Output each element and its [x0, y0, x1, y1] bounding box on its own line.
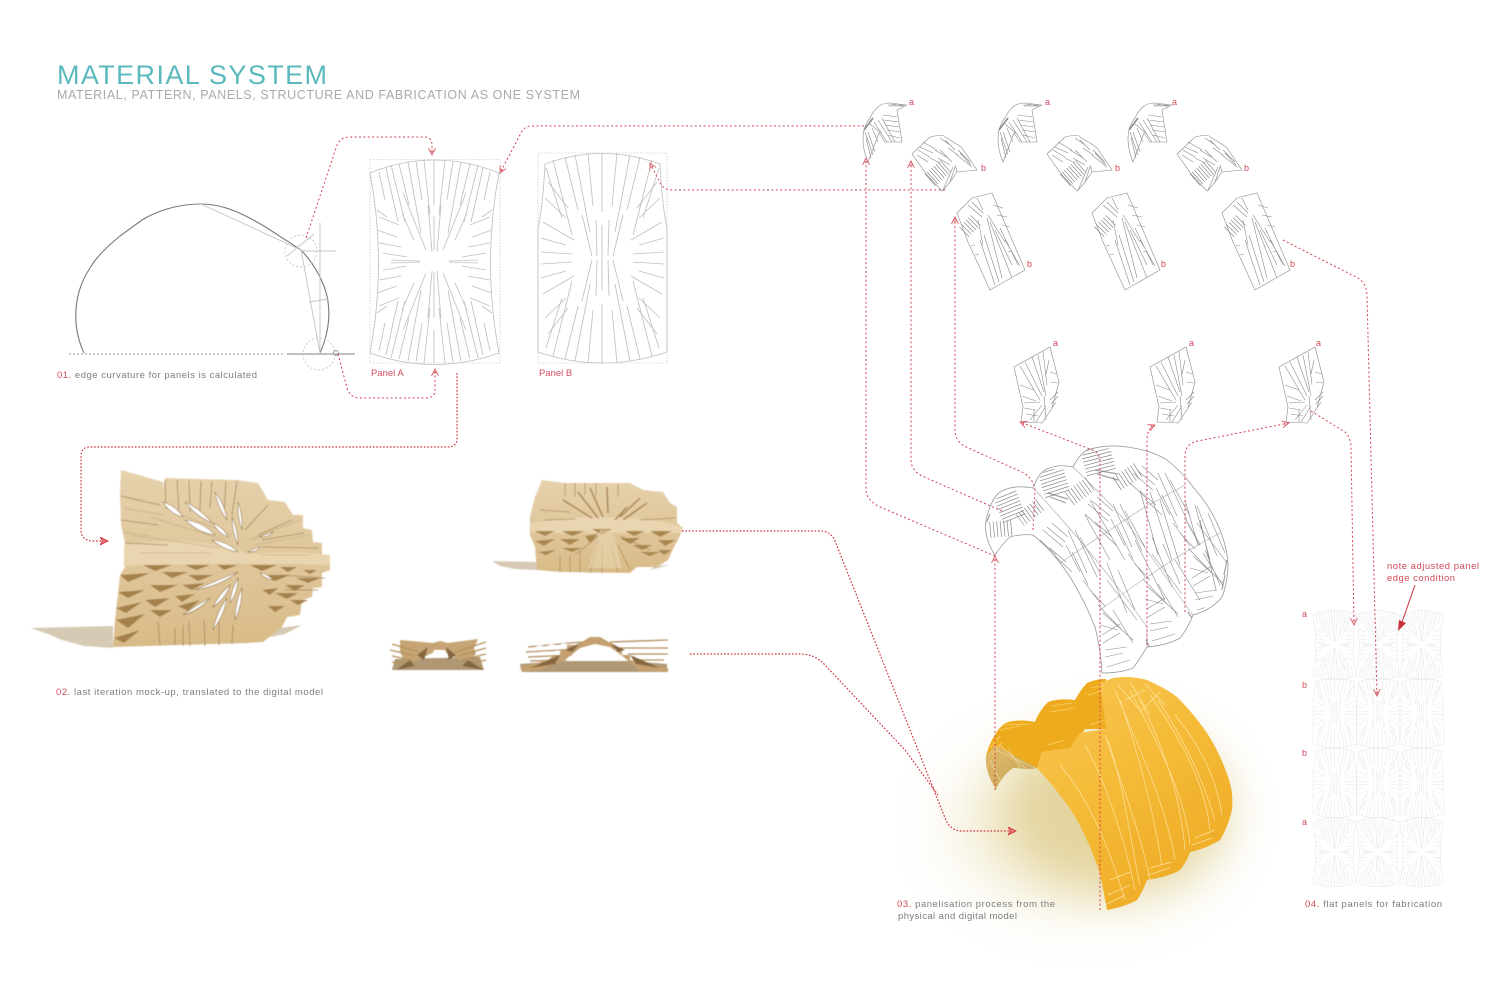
outline: [985, 446, 1228, 673]
lighter centre band: [124, 541, 330, 566]
flat panel row letters: b: [1302, 680, 1307, 690]
panel letters: a: [1189, 338, 1194, 348]
row a top: [1313, 610, 1443, 680]
panel letters: a: [1045, 97, 1050, 107]
caption 03: physical and digital model: [898, 911, 1017, 922]
panel B label: Panel B: [539, 368, 572, 379]
photo: large wooden mock-up: [31, 470, 330, 648]
row a bottom: [1313, 817, 1443, 887]
panel A drawing: [370, 160, 500, 364]
curve: arch profile: [76, 204, 329, 353]
small panels: exploded group: [863, 103, 1324, 423]
caption 04: 04. flat panels for fabrication: [1305, 899, 1442, 910]
dark diamonds: [114, 565, 320, 643]
shadow: [31, 625, 302, 648]
note text line 2: edge condition: [1387, 573, 1455, 584]
panel A label: Panel A: [371, 368, 404, 379]
photo: small wooden mock-up front: [492, 480, 683, 573]
caption 02: 02. last iteration mock-up, translated to the digital model: [56, 687, 323, 698]
panel b row 1: [912, 136, 1242, 191]
row b upper: [1313, 678, 1443, 748]
note arrow: [1398, 585, 1415, 631]
inner arch: [986, 735, 1037, 789]
panel letters: a: [1316, 338, 1321, 348]
panel letters: b: [1290, 259, 1295, 269]
panel letters: b: [1161, 259, 1166, 269]
flat panel row letters: a: [1302, 817, 1307, 827]
caption 01: 01. edge curvature for panels is calculated: [57, 370, 257, 381]
flat panel row letters: b: [1302, 748, 1307, 758]
outer skin: [1037, 677, 1232, 910]
wood body: [113, 470, 330, 647]
panel a row 3: [1014, 347, 1324, 423]
panel letters: b: [981, 163, 986, 173]
flat panels 04: [1313, 610, 1443, 887]
photo: small mock-up side view right: [520, 637, 668, 672]
lobe line sets: [985, 448, 1227, 667]
subtitle: MATERIAL, PATTERN, PANELS, STRUCTURE AND FABRICATION AS ONE SYSTEM: [57, 88, 580, 102]
glow under yellow dome: [950, 723, 1227, 907]
slits: [163, 492, 273, 630]
panel a row 1: [863, 103, 1172, 162]
construction lines: [69, 204, 355, 370]
photo: small mock-up side view left: [390, 639, 486, 670]
panel letters: [909, 97, 1321, 348]
caption 03: 03. panelisation process from the: [897, 899, 1055, 910]
flat panel row letters: a: [1302, 609, 1307, 619]
title: MATERIAL SYSTEM: [57, 60, 327, 90]
panel B drawing: [538, 153, 667, 363]
arrows: dotted red connectors: [81, 126, 1377, 910]
panel letters: a: [1053, 338, 1058, 348]
3D wireframe shell: [985, 446, 1228, 673]
panel letters: b: [1244, 163, 1249, 173]
note text: note adjusted panel: [1387, 561, 1479, 572]
panel letters: a: [909, 97, 914, 107]
row b lower: [1313, 748, 1443, 818]
caption 03: [897, 899, 1055, 922]
panel letters: a: [1172, 97, 1177, 107]
panel letters: b: [1027, 259, 1032, 269]
rear darker band: [986, 679, 1106, 768]
ribs and cross arcs: [1033, 467, 1220, 647]
panel letters: b: [1115, 163, 1120, 173]
panel b row 2: [957, 193, 1290, 290]
flat panel row letters: [1302, 609, 1307, 827]
white streaks: [1060, 682, 1222, 905]
comb edges and board lines: [121, 480, 325, 646]
diagram: edge curvature construction: [69, 204, 355, 370]
yellow dome render: [986, 677, 1232, 910]
